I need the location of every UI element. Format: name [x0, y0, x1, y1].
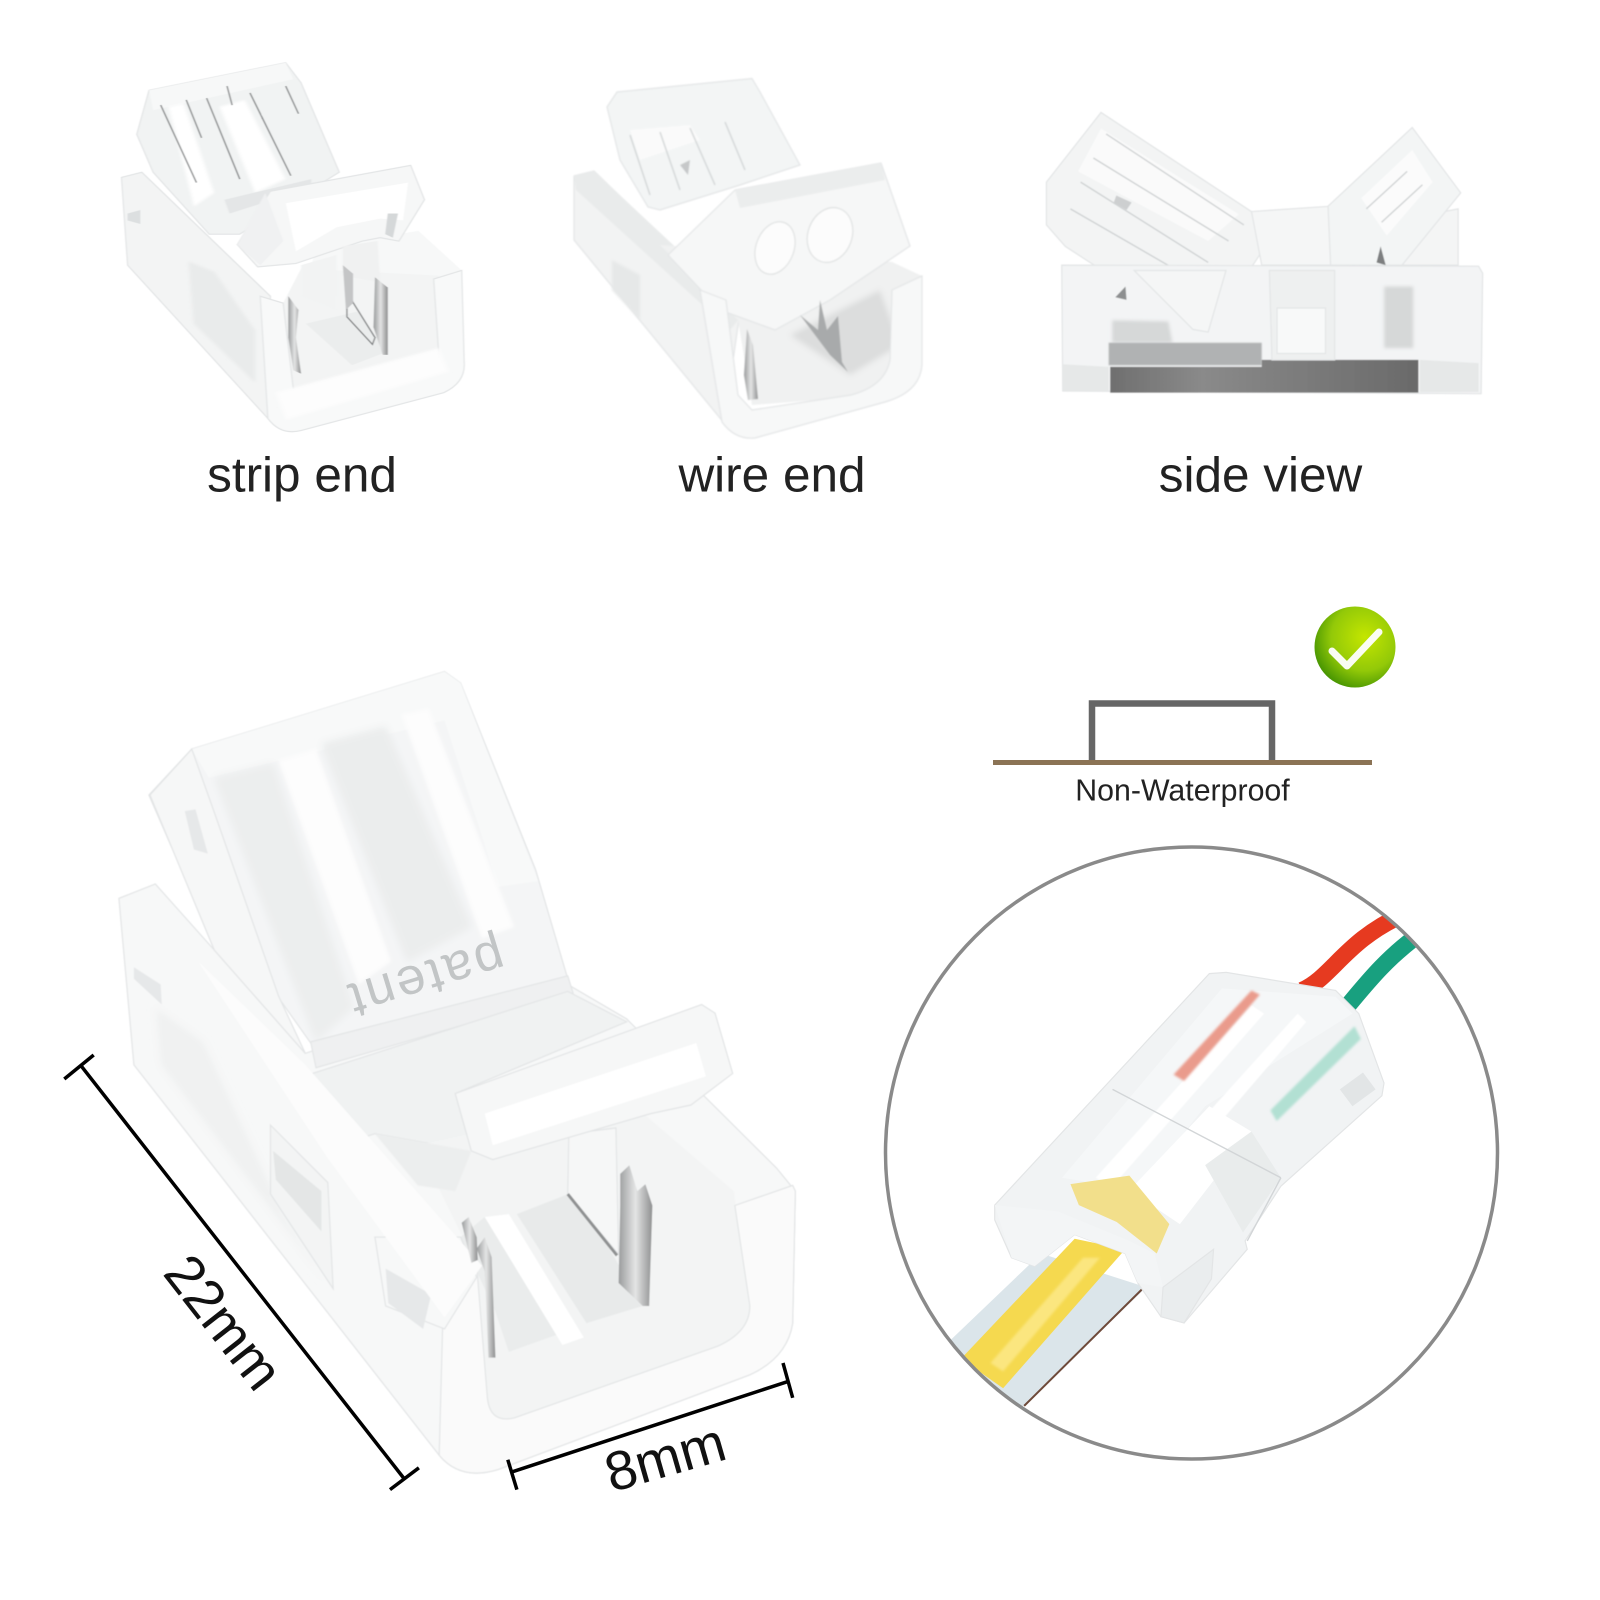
wires	[1302, 915, 1420, 1005]
photo: main connector close-up	[119, 672, 795, 1473]
callout: installed connector in circle	[886, 847, 1498, 1459]
dimension: 22mm length	[64, 1055, 419, 1490]
lid overlap	[1134, 270, 1226, 332]
dimension: 22mm length: 22mm	[152, 1243, 295, 1401]
rear post	[1397, 209, 1458, 265]
wire reflections	[1174, 990, 1260, 1081]
diagram: non-waterproof enclosure	[993, 704, 1372, 765]
photo: side view connector	[1046, 112, 1483, 394]
side rail	[198, 961, 482, 1317]
U-shaped front	[700, 276, 922, 438]
LED strip	[944, 1239, 1146, 1407]
ledge under lid	[295, 991, 627, 1151]
label: wire end: wire end	[677, 448, 866, 502]
front end lip	[995, 1206, 1138, 1283]
label: strip end: strip end	[207, 448, 397, 502]
clear cover ribs	[1062, 988, 1352, 1190]
label: Non-Waterproof: Non-Waterproof	[1075, 774, 1290, 808]
side wall	[121, 172, 270, 418]
inner floor	[283, 269, 441, 398]
embossed text: patent: patent	[339, 927, 512, 1030]
front clip lid with wire channels	[668, 163, 910, 330]
dark adhesive strip	[1110, 360, 1418, 393]
centre hinge	[1252, 206, 1331, 265]
inner floor	[418, 1099, 750, 1419]
icon: green check badge	[1314, 606, 1396, 688]
rear lid with contact grooves	[137, 63, 339, 234]
front clip lid	[237, 165, 424, 310]
metal pins	[744, 300, 848, 400]
white reflection band	[1129, 1106, 1251, 1224]
rear lid	[607, 78, 800, 210]
dimension: 8mm width: 8mm	[598, 1411, 732, 1504]
yellow reflection	[1070, 1176, 1169, 1254]
photo: wire end connector	[574, 78, 922, 438]
U-shaped front	[439, 1185, 795, 1473]
metal pins	[462, 1165, 652, 1358]
metal pins	[288, 265, 388, 374]
main body	[1062, 265, 1483, 394]
photo: strip end connector	[121, 63, 464, 432]
left lid	[1046, 112, 1262, 332]
inner floor	[660, 245, 922, 405]
floor channels	[461, 1128, 643, 1352]
internal shadows	[1112, 320, 1172, 343]
circle ring	[886, 847, 1498, 1459]
centre clip	[1269, 270, 1335, 360]
rear wall	[306, 231, 462, 286]
left wall	[574, 171, 740, 423]
front clip lid	[375, 1005, 733, 1191]
right lid	[1328, 127, 1461, 265]
rear lid	[149, 672, 573, 1068]
label: side view: side view	[1159, 448, 1363, 502]
connector housing	[995, 972, 1384, 1323]
body silhouette	[119, 884, 795, 1473]
U-shaped front	[260, 270, 464, 432]
dimension: 8mm width	[508, 1363, 793, 1504]
